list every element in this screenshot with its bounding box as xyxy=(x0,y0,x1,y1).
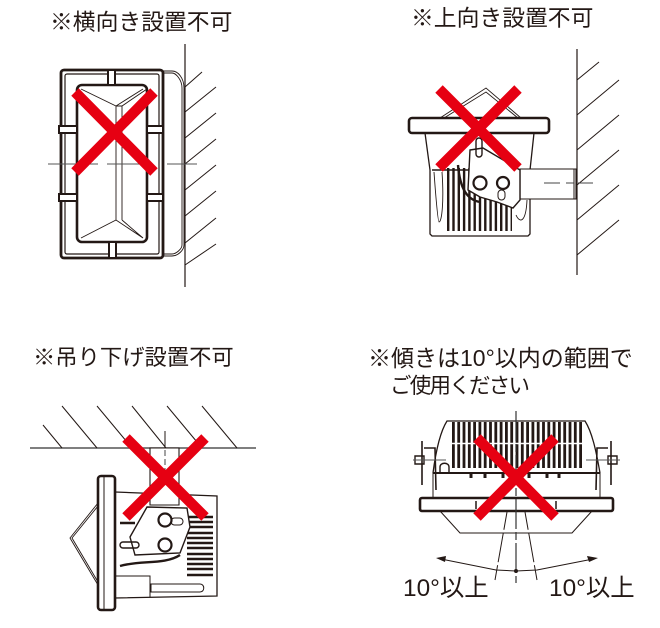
center lines xyxy=(413,411,620,583)
red cross xyxy=(439,89,518,168)
heading second line: ご使用ください xyxy=(390,374,530,398)
panel: upward installation not allowed xyxy=(409,5,619,275)
label: 10 degrees left: 10°以上 xyxy=(403,575,489,602)
bracket plate xyxy=(130,507,190,555)
center line xyxy=(544,182,593,184)
panel: hanging installation not allowed xyxy=(30,345,256,610)
red cross xyxy=(126,438,205,517)
lamp side view hanging xyxy=(70,431,217,610)
mounting arm xyxy=(150,448,179,505)
panel: tilt within 10 degrees xyxy=(368,345,635,602)
tilt arrows xyxy=(436,556,598,573)
panel: sideways installation not allowed xyxy=(48,9,232,287)
ceiling with hatching xyxy=(30,406,256,448)
heading: hanging: ※吊り下げ設置不可 xyxy=(33,345,234,370)
wall with hatching xyxy=(185,44,216,287)
heading: tilt limit: ※傾きは10°以内の範囲で xyxy=(368,345,633,371)
mounting arm xyxy=(520,169,576,199)
center line xyxy=(48,163,197,165)
lamp side view xyxy=(409,88,576,236)
heading: sideways: ※横向き設置不可 xyxy=(50,9,232,35)
lamp front view tilted xyxy=(415,421,617,533)
label: 10 degrees right: 10°以上 xyxy=(549,575,635,602)
bracket plate xyxy=(468,148,520,208)
red cross xyxy=(477,438,555,517)
lamp front view xyxy=(59,70,184,258)
red cross xyxy=(75,92,154,172)
wall with hatching xyxy=(577,49,619,275)
heading: upward: ※上向き設置不可 xyxy=(411,5,593,31)
